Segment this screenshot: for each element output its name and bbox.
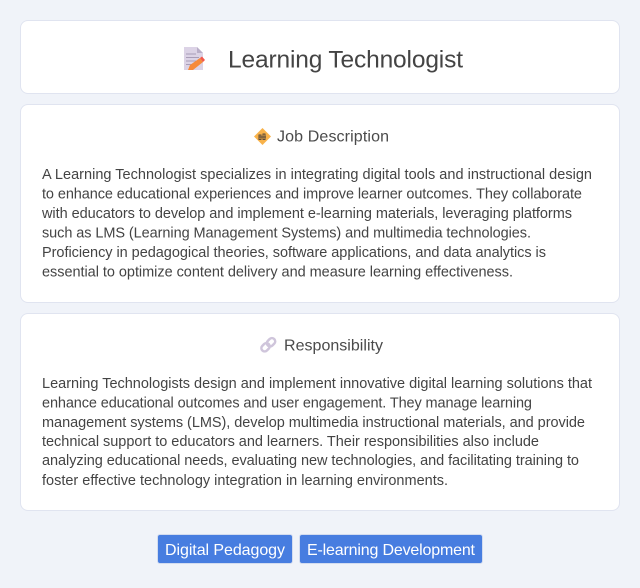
text block: job description: essential to optimize content delivery and measure learning effectiveness. xyxy=(42,264,513,280)
text block: responsibility: Learning Technologists design and implement innovative digital learning solutions that xyxy=(42,376,592,392)
tag: digital pedagogy xyxy=(157,534,293,564)
heading: job description: Job Description xyxy=(277,128,389,146)
text block: responsibility: management systems (LMS), develop multimedia instructional materials, and provide xyxy=(42,415,585,431)
heading: responsibility: Responsibility xyxy=(284,338,383,354)
text block: responsibility: technical support to educators and learners. Their responsibilities also include xyxy=(42,434,539,450)
icon: orange diamond xyxy=(254,128,271,145)
text block: job description: with educators to develop and implement e-learning materials, leveraging platforms xyxy=(41,206,572,222)
icon: document with pencil xyxy=(184,47,205,70)
text block: job description: to enhance educational experiences and improve learner outcomes. They collaborate xyxy=(42,186,582,202)
panel: responsibility xyxy=(20,313,620,511)
title: Learning Technologist xyxy=(228,46,463,74)
tag: digital pedagogy: Digital Pedagogy xyxy=(165,542,285,559)
text block: responsibility: analyzing educational needs, evaluating new technologies, and facilitating training to xyxy=(42,453,579,469)
icon: chain link xyxy=(260,336,276,353)
panel: job description xyxy=(20,104,620,303)
text block: job description: such as LMS (Learning Management Systems) and multimedia technologies. xyxy=(42,226,531,242)
tag: e-learning development: E-learning Development xyxy=(307,542,476,559)
text block: job description: A Learning Technologist specializes in integrating digital tools and instructional design xyxy=(42,167,592,183)
text block: job description: Proficiency in pedagogical theories, software applications, and data analytics is xyxy=(42,245,546,261)
tag: e-learning development xyxy=(299,534,483,564)
text block: job description xyxy=(41,167,592,280)
text block: responsibility: foster effective technology integration in learning environments. xyxy=(42,473,448,489)
text block: responsibility: enhance educational outcomes and user engagement. They manage learning xyxy=(42,396,532,412)
panel: title header xyxy=(20,20,620,94)
text block: responsibility xyxy=(42,376,592,489)
